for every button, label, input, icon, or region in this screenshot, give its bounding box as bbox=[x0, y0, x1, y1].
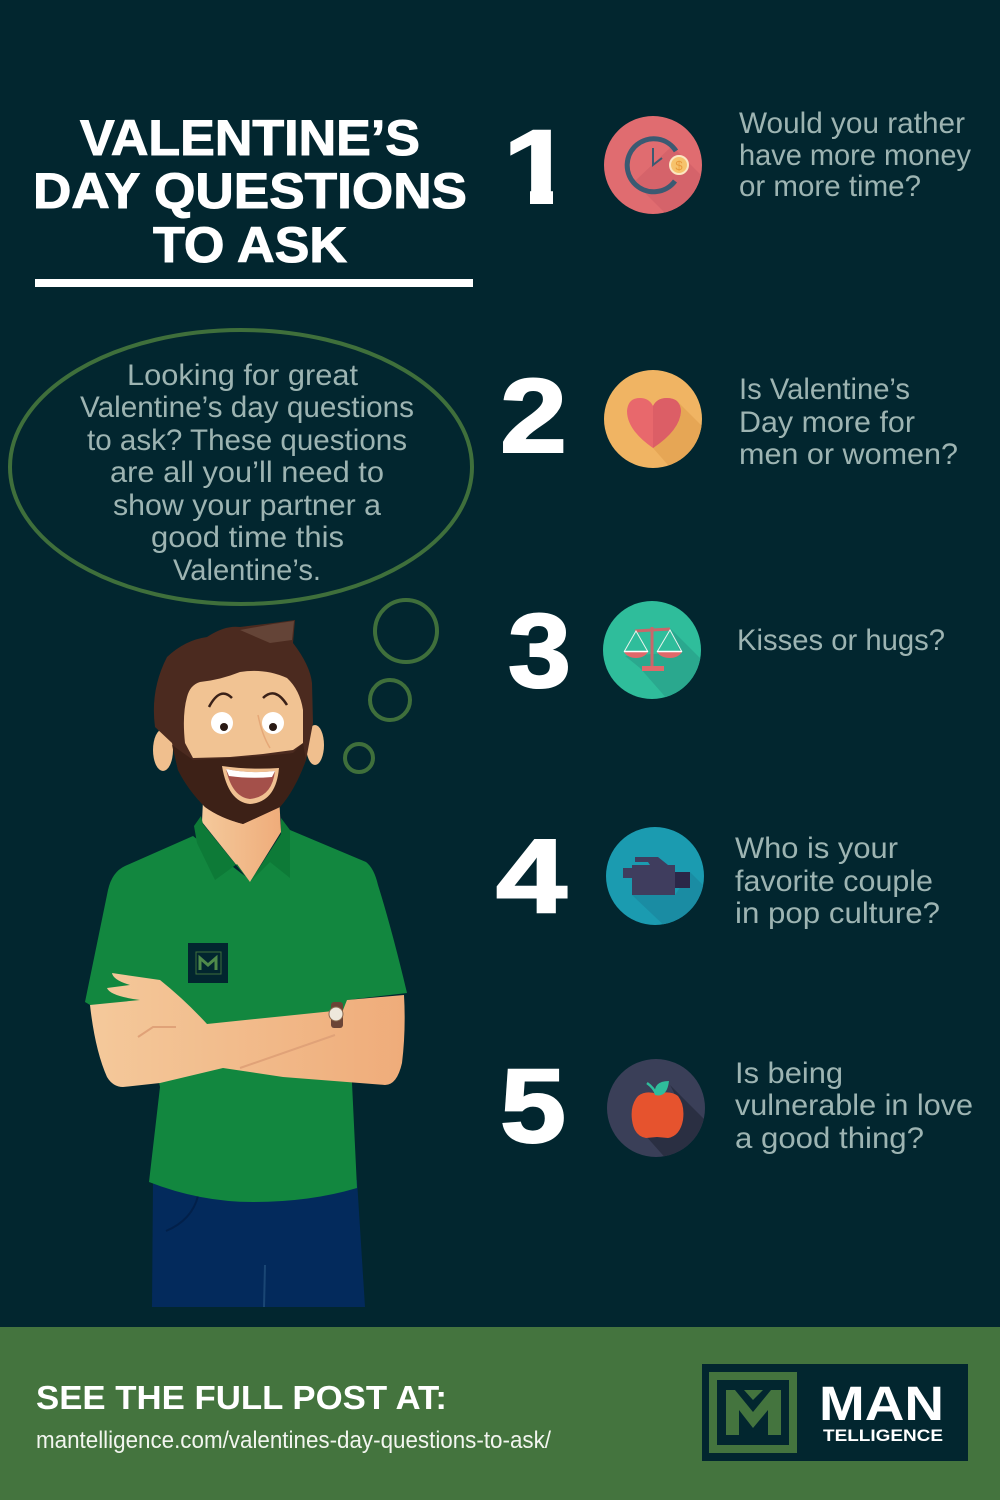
icon: apple bbox=[607, 1059, 705, 1157]
shirt badge bbox=[188, 943, 228, 983]
arm crease bbox=[138, 1027, 335, 1068]
hair and beard bbox=[154, 620, 313, 824]
face bbox=[184, 671, 303, 758]
question text 1: have more money bbox=[739, 139, 971, 172]
speech bubble intro bbox=[10, 330, 472, 604]
speech bubble intro: Valentine’s day questions bbox=[80, 391, 414, 424]
question text 1 bbox=[739, 107, 971, 203]
speech bubble intro: Looking for great bbox=[127, 359, 359, 392]
watch bbox=[329, 1002, 343, 1028]
icon: clock and coin bbox=[604, 116, 702, 214]
question text 5: Is being bbox=[735, 1057, 843, 1090]
question 1 bbox=[510, 112, 971, 214]
thought bubbles bbox=[345, 600, 437, 772]
speech bubble intro: good time this bbox=[151, 521, 344, 554]
question text 5: a good thing? bbox=[735, 1122, 924, 1155]
question text 4: Who is your bbox=[735, 832, 898, 865]
title bbox=[33, 110, 473, 287]
question text 2: Is Valentine’s bbox=[739, 373, 910, 406]
number 1: 1 bbox=[503, 109, 573, 226]
man illustration bbox=[85, 620, 407, 1307]
question text 2: Day more for bbox=[739, 406, 915, 439]
logo: MAN bbox=[819, 1378, 944, 1431]
collar bbox=[194, 816, 290, 882]
logo: TELLIGENCE bbox=[823, 1427, 943, 1445]
mouth bbox=[222, 766, 279, 804]
beard shade bbox=[172, 743, 306, 824]
footer url: mantelligence.com/valentines-day-questions-to-ask/ bbox=[36, 1427, 551, 1454]
question text 1: Would you rather bbox=[739, 107, 965, 140]
question text 5 bbox=[735, 1057, 973, 1155]
speech bubble intro: Valentine’s. bbox=[173, 554, 321, 587]
speech bubble intro: to ask? These questions bbox=[87, 424, 407, 457]
number 4: 4 bbox=[496, 818, 567, 935]
icon: scales bbox=[603, 601, 701, 699]
neck bbox=[202, 795, 281, 882]
speech bubble intro: show your partner a bbox=[113, 489, 381, 522]
arms bbox=[90, 973, 405, 1087]
eyes bbox=[211, 712, 284, 734]
ears bbox=[153, 725, 324, 771]
number 3: 3 bbox=[508, 593, 571, 710]
logo bbox=[702, 1364, 968, 1461]
question text 4: favorite couple bbox=[735, 865, 933, 898]
question text 4 bbox=[735, 832, 940, 930]
icon: video camera bbox=[606, 827, 704, 925]
question text 3: Kisses or hugs? bbox=[737, 624, 945, 657]
icon: clock and coin: $ bbox=[675, 158, 683, 173]
number 5: 5 bbox=[500, 1048, 566, 1165]
question text 1: or more time? bbox=[739, 170, 921, 203]
question 3 bbox=[509, 601, 944, 699]
question 2 bbox=[503, 370, 957, 468]
title: TO ASK bbox=[153, 217, 347, 273]
question text 5: vulnerable in love bbox=[735, 1089, 973, 1122]
number 2: 2 bbox=[500, 358, 567, 475]
title: DAY QUESTIONS bbox=[33, 163, 467, 219]
speech bubble intro: are all you’ll need to bbox=[110, 456, 384, 489]
shirt bbox=[85, 830, 407, 1202]
nose bbox=[258, 715, 270, 748]
pants bbox=[152, 1180, 365, 1307]
title: VALENTINE’S bbox=[80, 110, 420, 166]
question 4 bbox=[496, 827, 939, 929]
footer heading: SEE THE FULL POST AT: bbox=[36, 1379, 447, 1416]
question text 4: in pop culture? bbox=[735, 897, 940, 930]
hair highlight bbox=[240, 621, 294, 643]
eyebrows bbox=[209, 693, 287, 707]
footer band bbox=[0, 1327, 1000, 1500]
question text 2: men or women? bbox=[739, 438, 958, 471]
question 5 bbox=[502, 1059, 972, 1157]
question text 2 bbox=[739, 373, 958, 471]
icon: heart bbox=[604, 370, 702, 468]
